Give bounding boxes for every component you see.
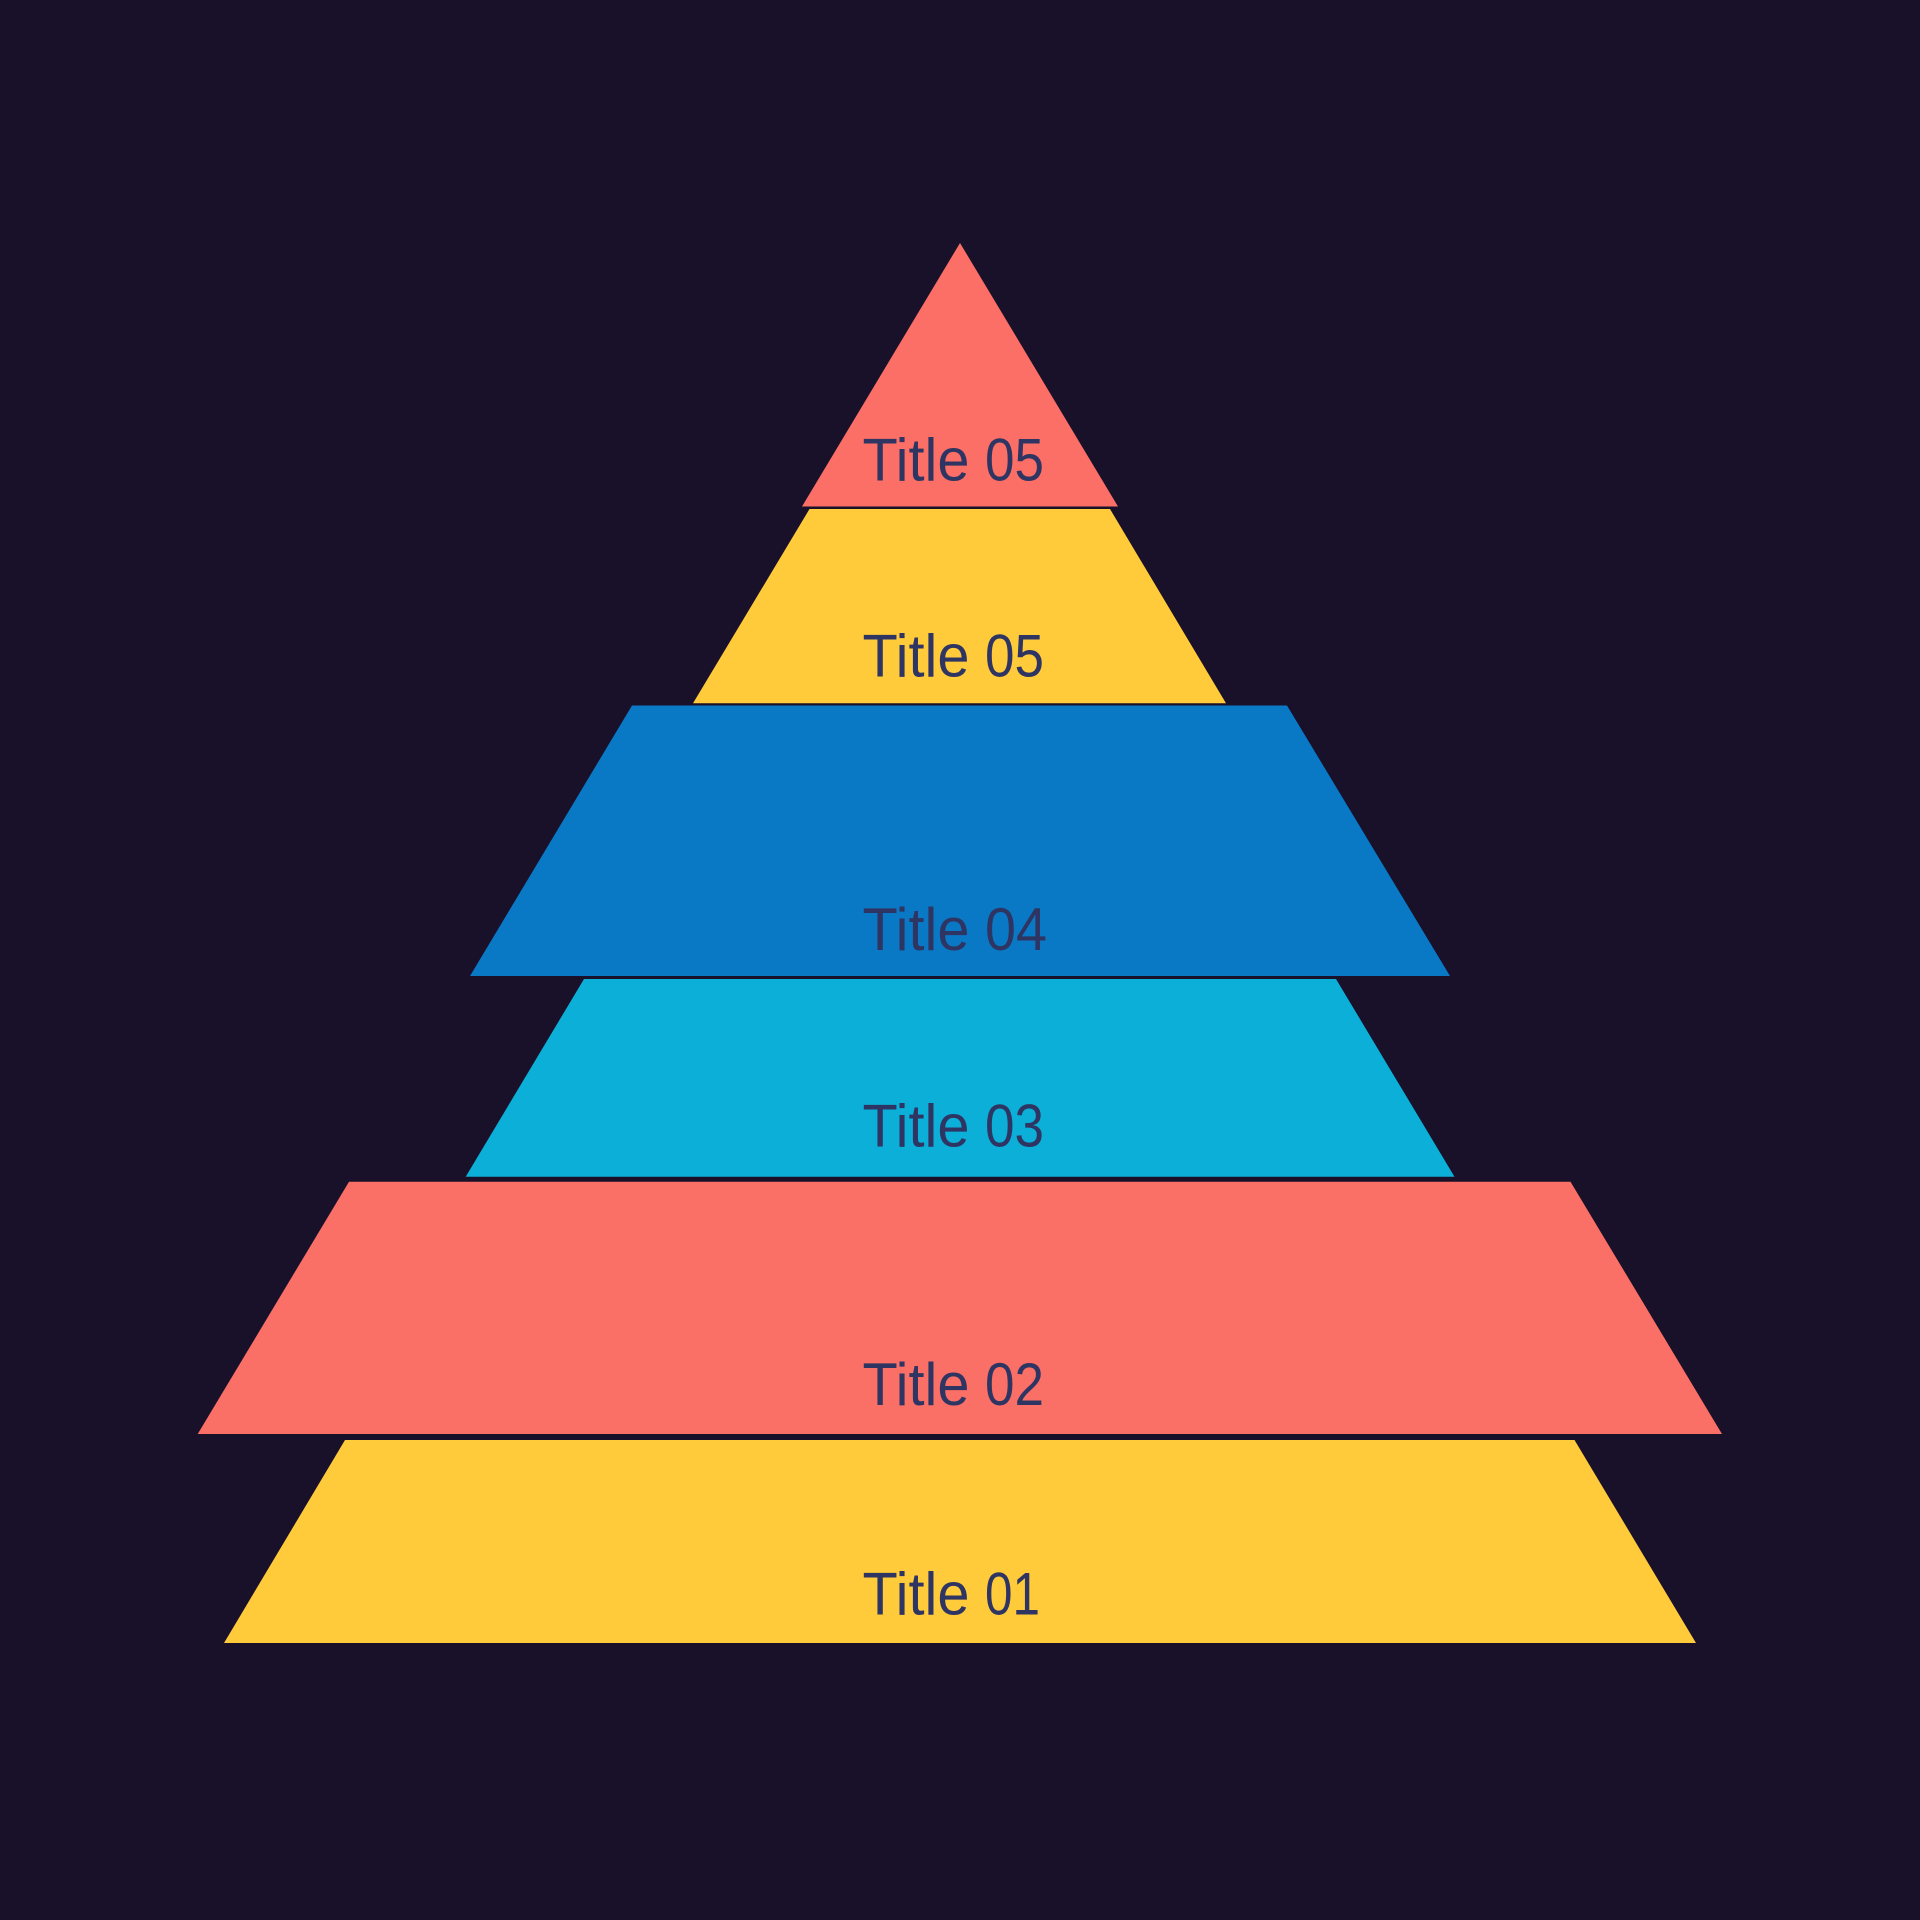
label: Title 02: Title — [862, 1351, 986, 1418]
label: Title 05: Title — [862, 623, 986, 690]
tier shape: yellow trapezoid — [693, 509, 1226, 703]
label: Title 03: Title — [862, 1093, 986, 1160]
label: Title 04: 04 — [985, 896, 1047, 963]
label: Title 01: 01 — [985, 1561, 1040, 1628]
tier: Title 04 — [470, 706, 1450, 976]
label: Title 03: 03 — [985, 1093, 1044, 1160]
tier: Title 02 — [198, 1182, 1722, 1434]
label: Title 05: 05 — [985, 623, 1044, 690]
tier: upper, Title 05 — [693, 509, 1226, 703]
tier shape: blue trapezoid — [470, 706, 1450, 976]
tier shape: cyan trapezoid — [466, 979, 1454, 1177]
label: Title 02: 02 — [985, 1351, 1044, 1418]
label: Title 04: Title — [862, 896, 986, 963]
tier: base, Title 01 — [224, 1440, 1696, 1643]
label: Title 05: 05 — [985, 427, 1044, 494]
tier shape: yellow trapezoid — [224, 1440, 1696, 1643]
tier shape: coral trapezoid — [198, 1182, 1722, 1434]
tier: apex, Title 05 — [802, 243, 1118, 506]
tier shape: coral triangle — [802, 243, 1118, 506]
label: Title 05: Title — [862, 427, 986, 494]
tier: Title 03 — [466, 979, 1454, 1177]
label: Title 01: Title — [862, 1561, 986, 1628]
